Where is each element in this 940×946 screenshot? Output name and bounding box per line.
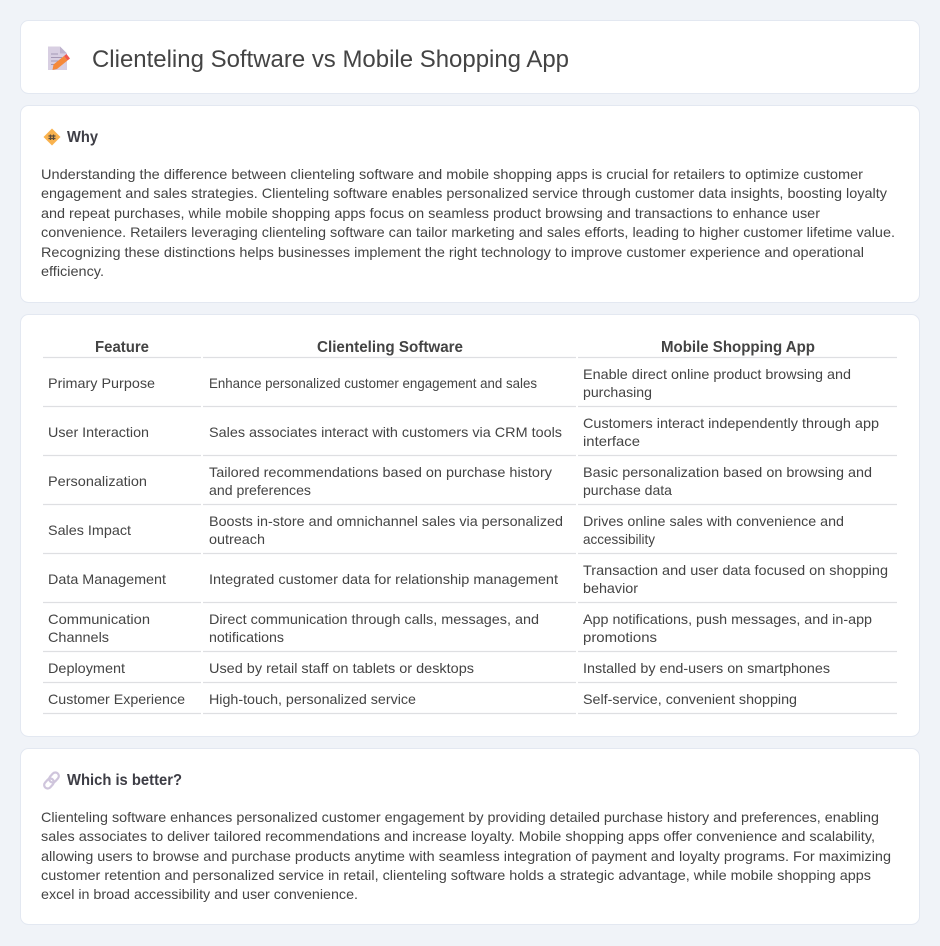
row: deployment: Deployment: [48, 660, 125, 676]
row: primary purpose: Enable direct online product browsing and: [583, 366, 851, 382]
row: user interaction: interface: [583, 433, 640, 449]
title: Clienteling Software vs Mobile Shopping App: [92, 46, 569, 73]
row: primary purpose: Enhance personalized customer engagement and sales: [209, 375, 537, 391]
row: data management: Transaction and user data focused on shopping: [583, 562, 888, 578]
row: personalization: Basic personalization based on browsing and: [583, 464, 872, 480]
panel: title header: [20, 20, 920, 94]
row: communication channels: App notifications, push messages, and in-app: [583, 611, 872, 627]
row: data management: Data Management: [48, 571, 166, 587]
table header row: Mobile Shopping App: [661, 339, 815, 356]
row: personalization: [48, 464, 872, 498]
text block: which is better paragraph: Clienteling software enhances personalized customer engagement by providing detailed purchase history and preferences, enabling: [41, 809, 879, 825]
row: user interaction: User Interaction: [48, 424, 149, 440]
row: customer experience: [48, 691, 797, 707]
row: deployment: [48, 660, 830, 676]
text block: why paragraph: and repeat purchases, while mobile shopping apps focus on seamless product browsing and transactions to enhance user: [41, 205, 820, 221]
heading: which is better: Which is better?: [67, 772, 182, 789]
text block: why paragraph: Recognizing these distinctions helps businesses implement the right technology to improve customer experience and operational: [41, 244, 864, 260]
row: user interaction: Sales associates interact with customers via CRM tools: [209, 424, 562, 440]
row: communication channels: Communication: [48, 611, 150, 627]
row: data management: behavior: [583, 580, 638, 596]
row: personalization: and preferences: [209, 482, 311, 498]
row: personalization: Tailored recommendations based on purchase history: [209, 464, 552, 480]
text block: which is better paragraph: excel in broad accessibility and user convenience.: [41, 886, 358, 902]
row: user interaction: Customers interact independently through app: [583, 415, 879, 431]
panel: which is better: [20, 748, 920, 924]
row: data management: Integrated customer data for relationship management: [209, 571, 558, 587]
text block: why paragraph: Understanding the difference between clienteling software and mobile shopping apps is crucial for retailers to optimize customer: [41, 166, 863, 182]
row: primary purpose: Primary Purpose: [48, 375, 155, 391]
row: personalization: purchase data: [583, 482, 672, 498]
row: sales impact: Sales Impact: [48, 522, 131, 538]
row: customer experience: Self-service, convenient shopping: [583, 691, 797, 707]
row: sales impact: Boosts in-store and omnichannel sales via personalized: [209, 513, 563, 529]
text block: which is better paragraph: allowing users to browse and purchase products anytime with seamless integration of payment and loyalty programs. For maximizing: [41, 848, 891, 864]
table header row: Clienteling Software: [317, 339, 463, 356]
row: communication channels: Channels: [48, 629, 109, 645]
row: deployment: Used by retail staff on tablets or desktops: [209, 660, 474, 676]
row: sales impact: [48, 513, 844, 547]
row: data management: [48, 562, 888, 596]
row: personalization: Personalization: [48, 473, 147, 489]
row: communication channels: [48, 611, 872, 645]
text block: which is better paragraph: customer retention and personalized service in retail, clienteling software holds a strategic advantage, while mobile shopping apps: [41, 867, 871, 883]
row: primary purpose: purchasing: [583, 384, 652, 400]
row: user interaction: [48, 415, 879, 449]
panel: comparison table: [20, 314, 920, 736]
row: communication channels: promotions: [583, 629, 657, 645]
text block: which is better paragraph: sales associates to deliver tailored recommendations and increase loyalty. Mobile shopping apps offer convenience and scalability,: [41, 828, 875, 844]
icon: document with pencil: [48, 46, 70, 70]
text block: why paragraph: engagement and sales strategies. Clienteling software enables personalized service through customer data insights, boosting loyalty: [41, 185, 887, 201]
row: primary purpose: [48, 366, 851, 400]
text block: why paragraph: convenience. Retailers leveraging clienteling software can tailor marketing and sales efforts, leading to higher customer lifetime value.: [41, 224, 895, 240]
text block: which is better paragraph: [41, 809, 891, 902]
panel: why: [20, 106, 920, 302]
heading: why: Why: [67, 129, 98, 146]
row: communication channels: notifications: [209, 629, 284, 645]
row: sales impact: outreach: [209, 531, 265, 547]
icon: warning diamond: [44, 128, 60, 146]
row: customer experience: Customer Experience: [48, 691, 185, 707]
row: sales impact: accessibility: [583, 531, 655, 547]
table header row: Feature: [95, 339, 149, 356]
table header row: [95, 339, 815, 356]
row: customer experience: High-touch, personalized service: [209, 691, 416, 707]
text block: why paragraph: efficiency.: [41, 263, 104, 279]
text block: why paragraph: [41, 166, 895, 279]
row: communication channels: Direct communication through calls, messages, and: [209, 611, 539, 627]
row: deployment: Installed by end-users on smartphones: [583, 660, 830, 676]
icon: link: [43, 771, 60, 790]
row: sales impact: Drives online sales with convenience and: [583, 513, 844, 529]
